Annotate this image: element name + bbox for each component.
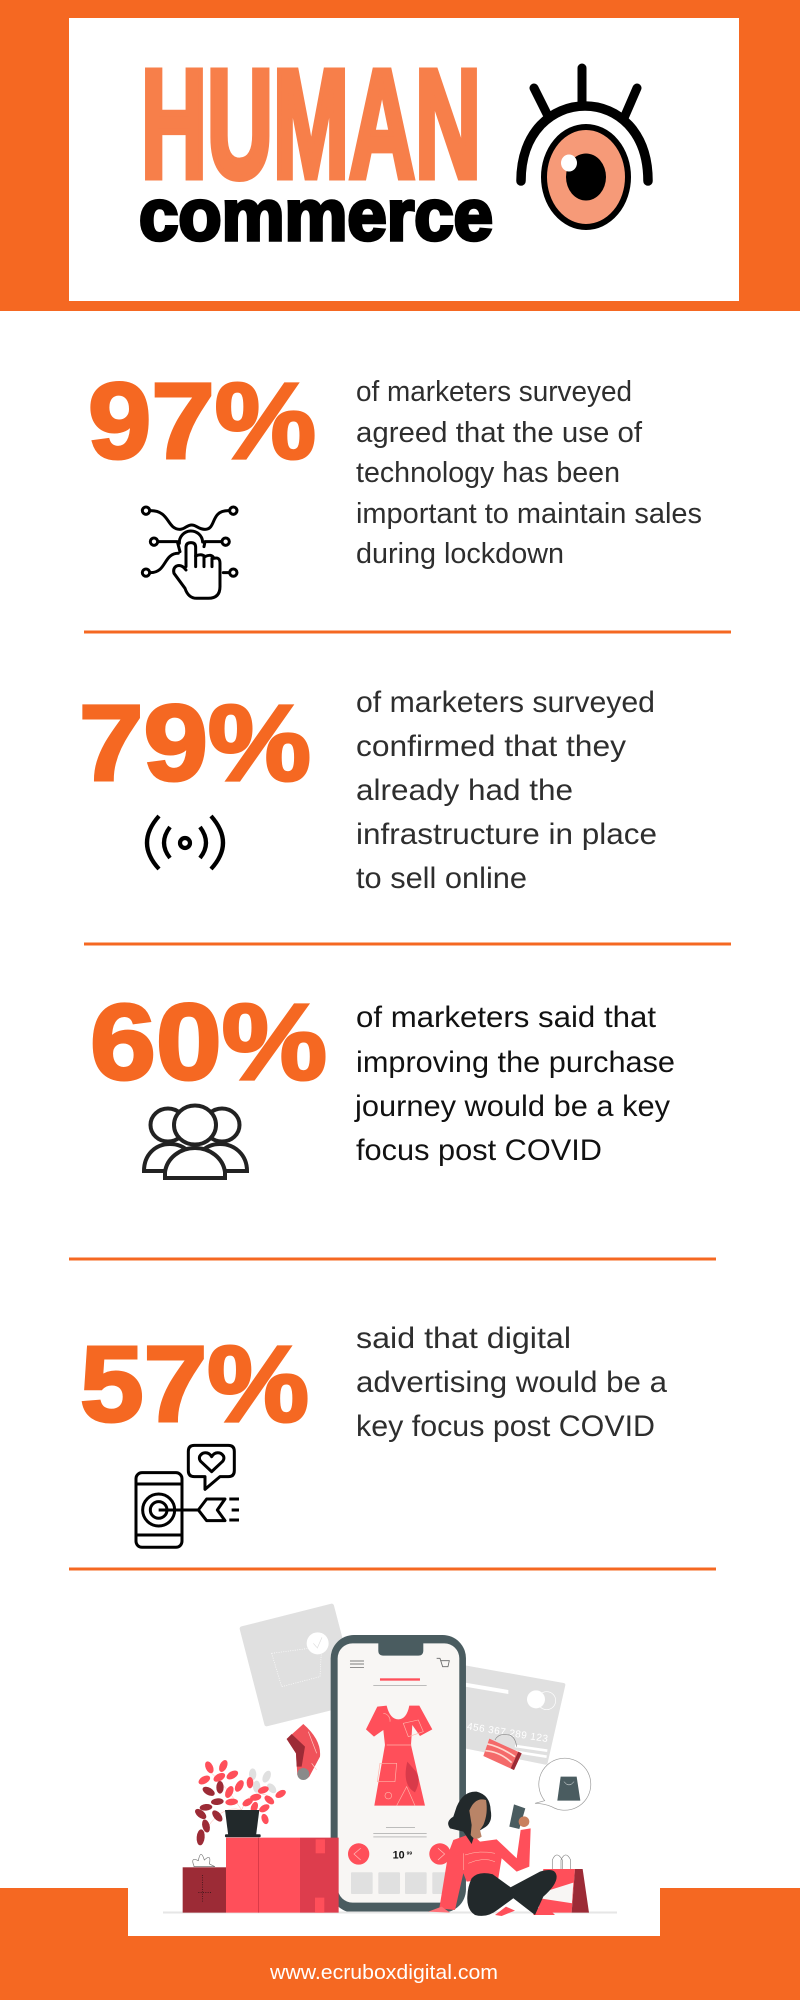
woman's legs	[467, 1870, 557, 1916]
stat text: during lockdown	[356, 538, 564, 570]
pot	[225, 1810, 259, 1836]
header band	[0, 0, 800, 311]
icon: phone target with arrow and heart bubble	[136, 1445, 239, 1547]
stat text: to sell online	[356, 862, 527, 895]
woman's hair and face	[448, 1792, 491, 1844]
ground line	[163, 1912, 617, 1914]
stat number 57%: 57%	[80, 1323, 309, 1444]
logo: Human Commerce	[139, 38, 648, 256]
boxes and plant	[183, 1724, 339, 1913]
footer website: www.ecruboxdigital.com	[269, 1962, 498, 1984]
carousel buttons	[348, 1843, 369, 1865]
footer band	[0, 1888, 800, 2000]
stat number 60%: 60%	[90, 981, 327, 1102]
stat text: confirmed that they	[356, 730, 626, 763]
logo word commerce: commerce	[139, 176, 493, 256]
credit card back right: 456 367 289 123	[466, 1721, 549, 1745]
stat text: important to maintain sales	[356, 498, 702, 530]
product thumbnails	[351, 1872, 373, 1894]
stat block: 97%	[88, 360, 702, 598]
credit card back right	[433, 1662, 563, 1763]
stat text: key focus post COVID	[356, 1410, 655, 1443]
stat text	[356, 686, 657, 895]
stat text	[354, 1001, 675, 1167]
dress	[366, 1706, 432, 1806]
icon: group of people	[144, 1106, 247, 1178]
stat text: journey would be a key	[354, 1090, 670, 1123]
stat block: 79%	[79, 682, 657, 895]
logo word HUMAN: HUMAN	[141, 38, 481, 210]
stat text: agreed that the use of	[356, 417, 642, 449]
woman's phone	[509, 1804, 525, 1829]
stat text: of marketers surveyed	[356, 376, 632, 408]
stat text: infrastructure in place	[356, 818, 657, 851]
stat text: of marketers surveyed	[356, 686, 655, 719]
stat number 79%: 79%	[79, 682, 311, 803]
icon: touch circuit hand	[142, 507, 237, 598]
stat text: advertising would be a	[356, 1366, 667, 1399]
stat text: focus post COVID	[356, 1134, 602, 1167]
stat text: already had the	[356, 774, 573, 807]
plant leaves	[202, 1770, 270, 1837]
woman's feet	[495, 1907, 555, 1916]
stat text	[356, 1322, 667, 1443]
stat block: 57%	[80, 1322, 667, 1547]
phone and its screen: 99	[407, 1851, 412, 1857]
icon: broadcast signal	[147, 816, 223, 869]
stat text: technology has been	[356, 457, 620, 489]
credit card back left	[242, 1606, 357, 1724]
icon: eye logo	[521, 68, 648, 227]
illustration: online shopping scene	[163, 1606, 617, 1916]
shopper and accessories	[428, 1734, 591, 1916]
stat text: said that digital	[356, 1322, 571, 1355]
sock	[287, 1724, 320, 1780]
stat number 97%: 97%	[88, 360, 316, 481]
woman's body and arms	[439, 1828, 531, 1910]
stat text: improving the purchase	[356, 1046, 675, 1079]
shopping bag	[538, 1855, 589, 1913]
stat block: 60%	[90, 981, 675, 1178]
stat text: of marketers said that	[356, 1001, 657, 1034]
stat text	[356, 376, 702, 570]
speech bubble with bag	[535, 1758, 591, 1810]
phone and its screen	[331, 1635, 466, 1913]
handbag	[483, 1734, 522, 1770]
price: 10	[393, 1850, 405, 1862]
